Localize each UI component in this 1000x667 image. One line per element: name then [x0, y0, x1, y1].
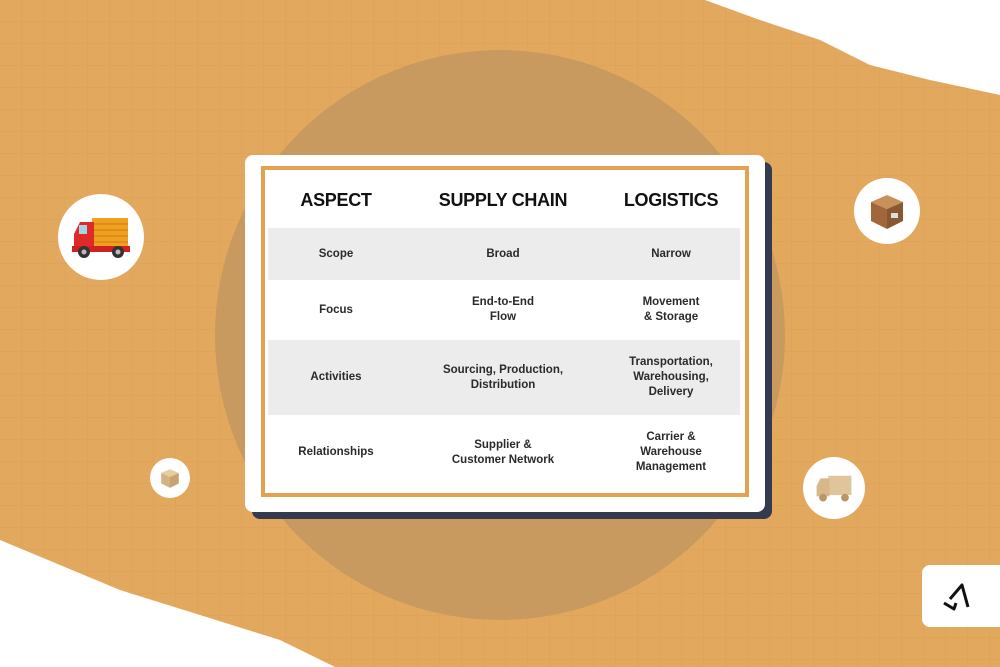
- header row: SUPPLY CHAIN: [439, 190, 567, 210]
- row: relationships: Carrier &: [646, 431, 696, 443]
- row: focus: Movement: [643, 296, 699, 308]
- row: relationships: Warehouse: [640, 446, 702, 458]
- row: focus: & Storage: [644, 311, 698, 323]
- row: relationships: [298, 431, 706, 473]
- row: focus: End-to-End: [472, 296, 534, 308]
- icon: small box: [150, 458, 190, 498]
- row: activities: Sourcing, Production,: [443, 364, 563, 376]
- row: relationships: Supplier &: [474, 438, 532, 450]
- row: activities: Transportation,: [629, 356, 713, 368]
- row: scope: [319, 248, 691, 260]
- icon: faded truck: [803, 457, 865, 519]
- icon: truck: [58, 194, 144, 280]
- header row: [300, 190, 718, 210]
- row: relationships: Relationships: [298, 446, 374, 458]
- row: scope: Scope: [319, 248, 353, 260]
- header row: LOGISTICS: [624, 190, 718, 210]
- row: focus: Flow: [490, 311, 516, 323]
- card: comparison table: [245, 155, 772, 519]
- logo: [922, 565, 1000, 627]
- header row: ASPECT: [300, 190, 372, 210]
- row: relationships: Management: [636, 461, 706, 473]
- row: activities: Delivery: [649, 386, 693, 398]
- row: scope: Narrow: [651, 248, 691, 260]
- row: activities: Warehousing,: [633, 371, 709, 383]
- icon: box: [854, 178, 920, 244]
- row: activities: Distribution: [471, 378, 535, 390]
- row: focus: Focus: [319, 304, 353, 316]
- row: scope: Broad: [486, 248, 520, 260]
- row: focus: [319, 296, 700, 323]
- row: relationships: Customer Network: [452, 454, 554, 466]
- row: activities: Activities: [310, 371, 362, 383]
- row: activities: [310, 356, 713, 398]
